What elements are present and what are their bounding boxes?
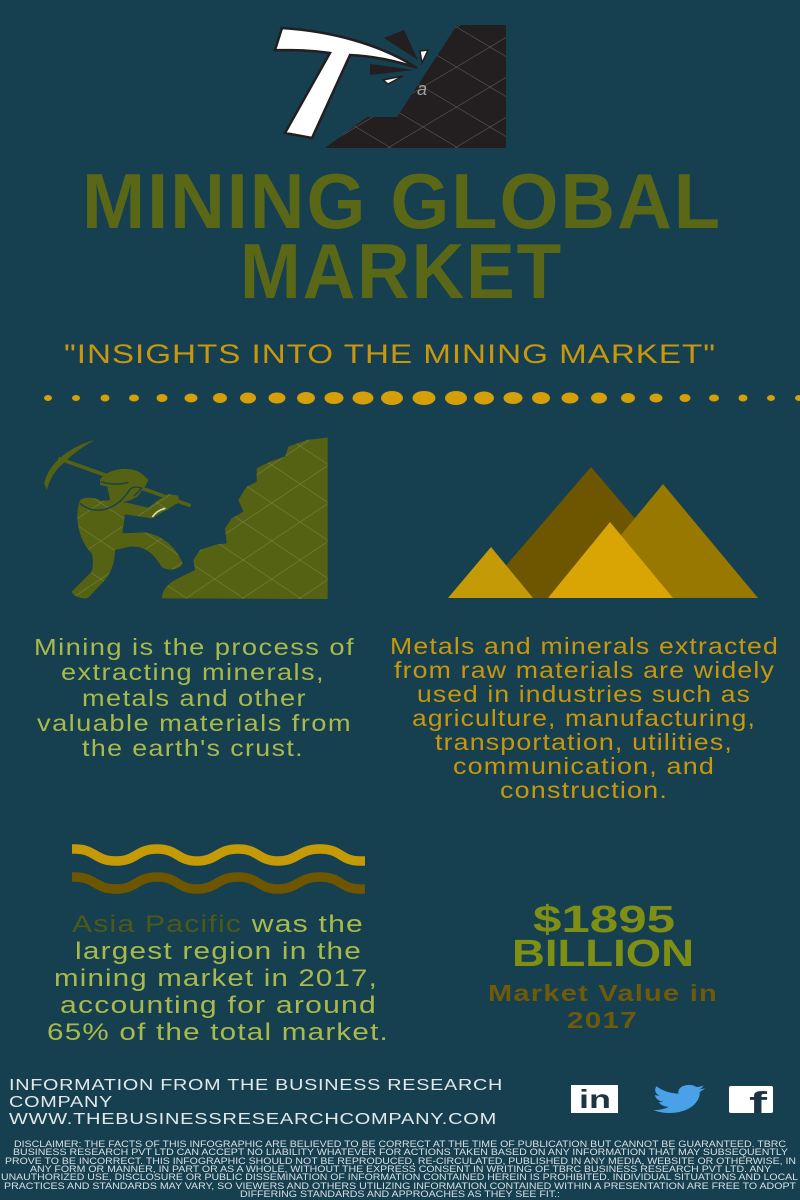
text block: uses of metals and minerals: transportation, utilities, [435,729,733,755]
title [82,157,722,315]
stat: market value: Market Value in [488,980,718,1006]
pickaxe [275,28,417,138]
disclaimer: DISCLAIMER: THE FACTS OF THIS INFOGRAPHIC ARE BELIEVED TO BE CORRECT AT THE TIME OF PUBLICATION BUT CANNOT BE GUARANTEED. TBRC [14,1139,787,1149]
rock shards [370,30,418,75]
text block: uses of metals and minerals [390,633,779,803]
disclaimer: PROVE TO BE INCORRECT. THIS INFOGRAPHIC SHOULD NOT BE REPRODUCED, RE-CIRCULATED, PUBLISHED IN ANY MEDIA, WEBSITE OR OTHERWISE, IN [5,1156,796,1166]
stat: market value: 2017 [567,1007,638,1033]
miner figure [72,494,183,598]
pick blade [44,440,95,490]
text block: uses of metals and minerals: from raw materials are widely [394,657,775,683]
text block: uses of metals and minerals: communication, and [453,753,715,779]
disclaimer: UNAUTHORIZED USE, DISCLOSURE OR PUBLIC DISSEMINATION OF INFORMATION CONTAINED HEREIN IS PROHIBITED. INDIVIDUAL SITUATIONS AND LOCAL [1,1172,798,1182]
subtitle: "INSIGHTS INTO THE MINING MARKET" [64,339,716,369]
title: MINING GLOBAL [82,157,722,245]
dotted divider [44,391,800,405]
text block: Asia Pacific: largest region in the [75,938,362,965]
icon: Facebook: f [749,1085,768,1120]
disclaimer: ANY FORM OR MANNER, IN PART OR AS A WHOLE, WITHOUT THE EXPRESS CONSENT IN WRITING OF TBRC BUSINESS RESEARCH PVT LTD. ANY [30,1164,771,1174]
text block: Asia Pacific: Asia Pacific was the [72,911,364,938]
icon: pickaxe striking rock [275,25,506,148]
text block: mining definition: metals and other [82,685,307,711]
text block: Asia Pacific [47,911,389,1046]
text block: mining definition: valuable materials from [37,710,352,736]
disclaimer: PRACTICES AND STANDARDS MAY VARY, SO VIEWERS AND OTHERS UTILIZING INFORMATION CONTAINED WITHIN A PRESENTATION ARE FREE TO ADOPT [4,1181,797,1191]
icon: Twitter [653,1085,705,1113]
text block: Asia Pacific: mining market in 2017, [54,965,378,992]
text block: uses of metals and minerals: construction. [500,777,668,803]
helmet and head [100,469,148,502]
pick handle [58,458,191,506]
text block: mining definition: extracting minerals, [61,659,325,685]
icon: LinkedIn: in [579,1084,611,1114]
source information: WWW.THEBUSINESSRESEARCHCOMPANY.COM [9,1111,497,1128]
icon: mountains [448,467,758,598]
title: MARKET [240,227,563,315]
source information [9,1077,503,1128]
text block: uses of metals and minerals: used in industries such as [417,681,751,707]
small letter mark: a [417,79,427,99]
icon: LinkedIn [571,1084,618,1114]
text block: mining definition [34,634,355,761]
source information: INFORMATION FROM THE BUSINESS RESEARCH [9,1077,503,1094]
icon: miner with pickaxe and rock wall [44,438,328,599]
icon: Facebook [729,1085,773,1120]
text block: uses of metals and minerals: agriculture, manufacturing, [412,705,756,731]
text block: Asia Pacific: accounting for around [60,992,377,1019]
glove highlight [152,508,165,517]
stat: market value [488,899,718,1033]
disclaimer: BUSINESS RESEARCH PVT LTD CAN ACCEPT NO LIABILITY WHATEVER FOR ACTIONS TAKEN BASED ON ANY INFORMATION THAT MAY SUBSEQUENTLY [13,1147,788,1157]
rock face [325,25,506,148]
disclaimer: DIFFERING STANDARDS AND APPROACHES AS THEY SEE FIT.: [240,1189,560,1199]
text block: mining definition: the earth's crust. [82,735,304,761]
source information: COMPANY [9,1094,113,1111]
disclaimer [1,1139,798,1199]
text block: uses of metals and minerals: Metals and minerals extracted [390,633,779,659]
stat: market value: $1895 [533,899,675,941]
icon: wavy lines [72,849,365,889]
collar and head straps [80,482,142,510]
text block: mining definition: Mining is the process of [34,634,355,660]
text block: Asia Pacific: 65% of the total market. [47,1019,389,1046]
rock wall [162,438,328,599]
stat: market value: BILLION [512,933,694,975]
